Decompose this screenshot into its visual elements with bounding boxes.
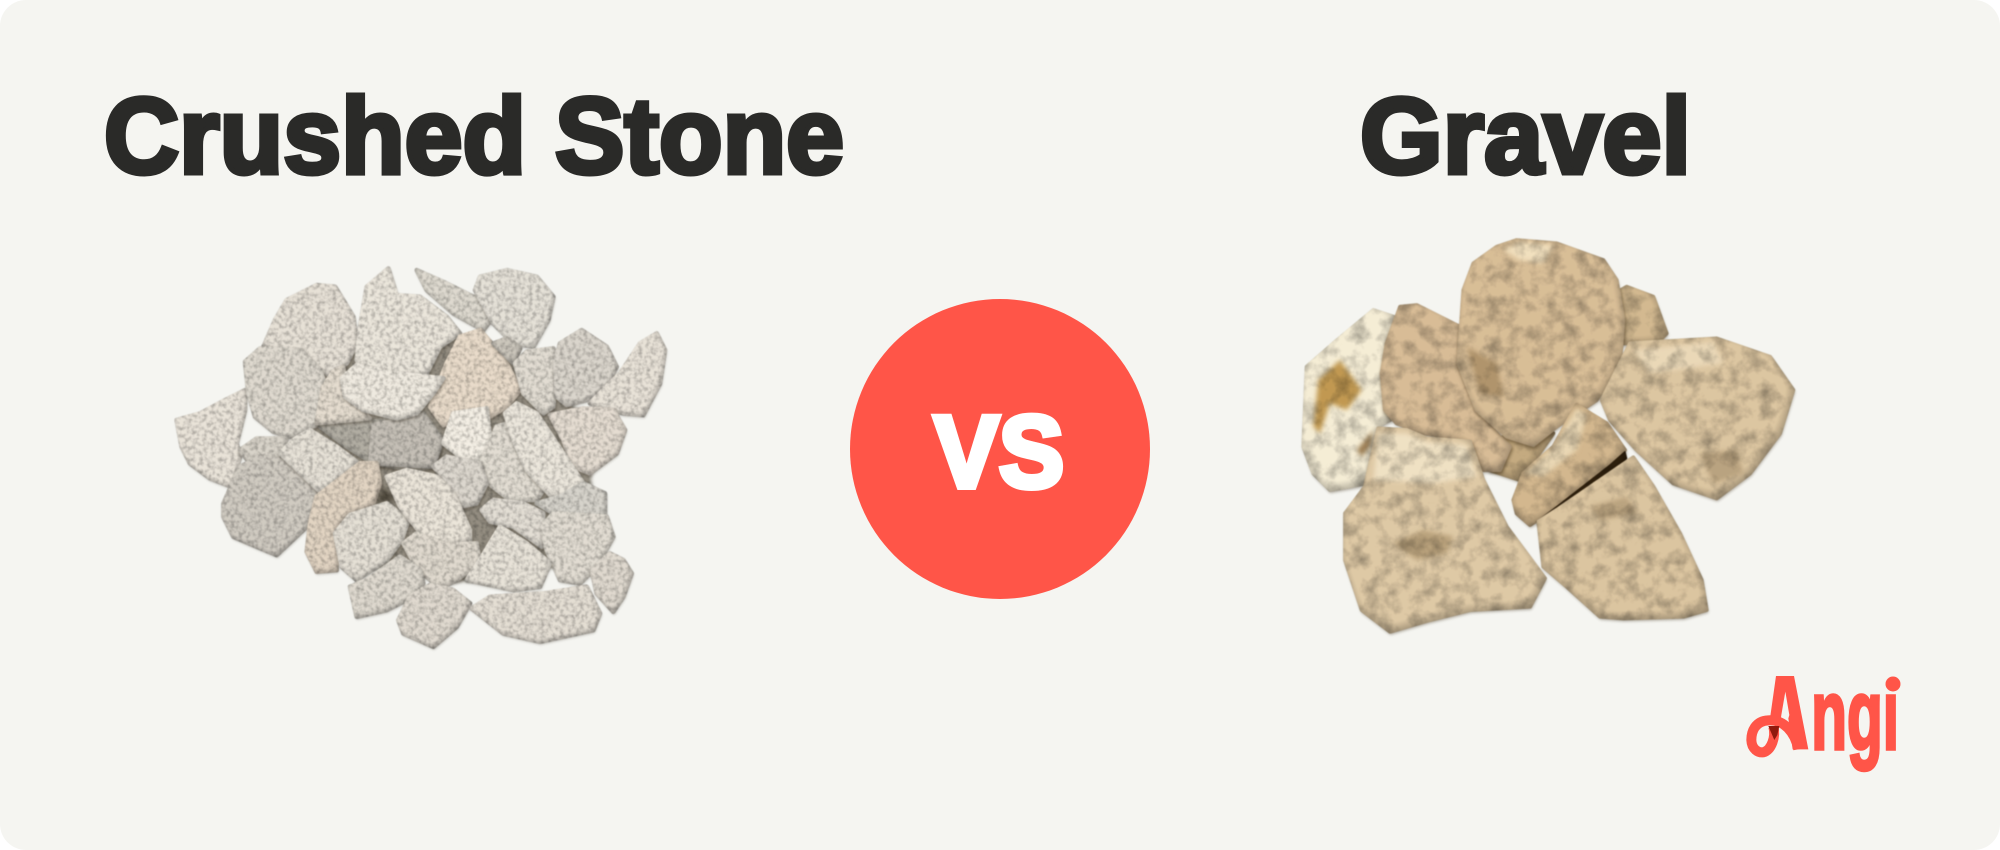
icon: gravel pile xyxy=(1303,240,1793,632)
logo: Angi xyxy=(1751,659,1904,771)
logo letter A and swash xyxy=(1751,676,1808,752)
VS badge xyxy=(850,299,1150,599)
logo dot xyxy=(1886,676,1900,692)
VS label: VS xyxy=(934,395,1064,509)
logo dot patch xyxy=(1882,668,1904,692)
badge circle xyxy=(850,299,1150,599)
icon: crushed stone pile xyxy=(177,268,665,647)
heading: Crushed Stone: Crushed Stone xyxy=(104,75,844,196)
heading: Gravel: Gravel xyxy=(1360,75,1691,196)
